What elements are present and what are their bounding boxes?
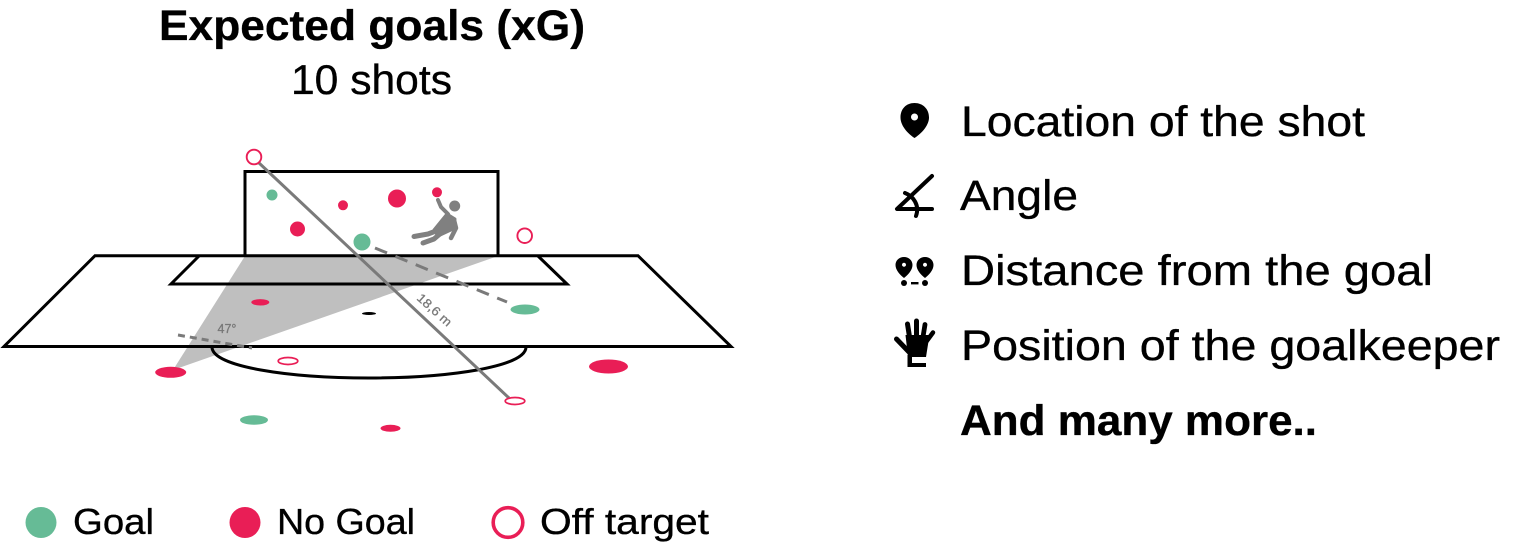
legend: off target: Off target — [540, 501, 709, 542]
legend — [26, 501, 709, 542]
angle label: 47° — [218, 322, 236, 336]
shot locations on pitch — [155, 299, 628, 432]
text: distance: Distance from the goal — [961, 247, 1433, 295]
icon: goalkeeper glove — [896, 321, 933, 367]
goalkeeper — [414, 200, 460, 243]
goal frame — [245, 172, 498, 256]
distance line — [258, 162, 509, 398]
six yard box — [171, 256, 567, 284]
distance label: 18,6 m — [414, 291, 455, 329]
icon: distance pins — [896, 257, 934, 286]
angle reference dashed line — [178, 335, 252, 348]
shot trajectory dashed line — [375, 248, 507, 302]
text: angle: Angle — [960, 172, 1078, 220]
text: location: Location of the shot — [961, 98, 1365, 146]
legend: no goal: No Goal — [277, 501, 415, 542]
subtitle: 10 shots — [291, 56, 452, 103]
legend: off target — [493, 501, 709, 542]
icon: location pin — [900, 103, 929, 138]
factors list — [896, 98, 1500, 445]
icon: angle — [897, 176, 932, 216]
text: goalkeeper position: Position of the goalkeeper — [961, 322, 1500, 370]
shot diagram — [4, 150, 731, 432]
legend: goal — [26, 501, 154, 542]
penalty area — [4, 256, 731, 346]
legend: goal: Goal — [73, 501, 154, 542]
text: and many more: And many more.. — [960, 397, 1317, 445]
penalty arc — [212, 347, 526, 378]
shots on goal — [247, 150, 532, 250]
title: Expected goals (xG) — [159, 2, 585, 50]
penalty spot — [362, 312, 376, 315]
shooting angle wedge — [173, 256, 498, 370]
